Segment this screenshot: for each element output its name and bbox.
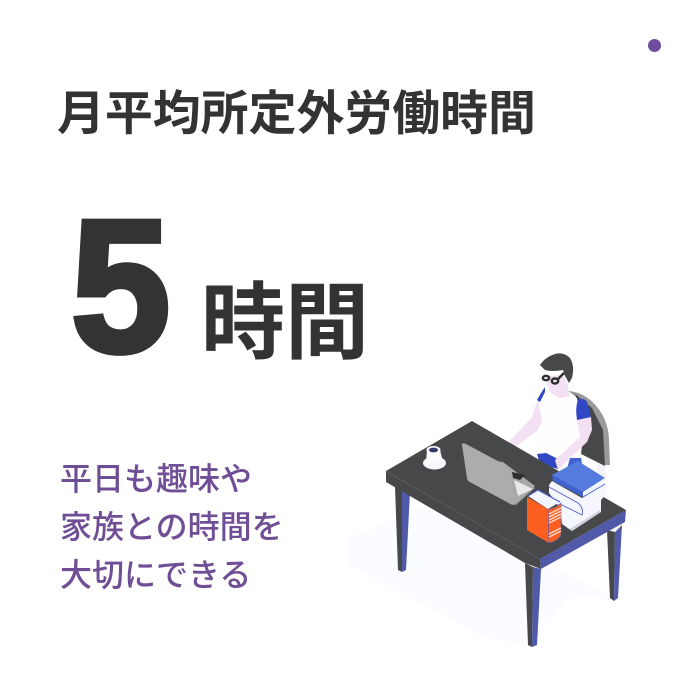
desk left edge <box>386 471 541 569</box>
shirt <box>537 397 581 462</box>
blue book <box>552 461 605 492</box>
description text: 平日も趣味や <box>60 460 252 496</box>
decorative purple dot <box>648 38 660 52</box>
person <box>509 353 592 472</box>
big number: 5: 5 <box>71 181 170 391</box>
right leg <box>607 530 615 601</box>
description text <box>60 460 284 593</box>
chair <box>568 391 610 480</box>
left arm <box>509 400 542 447</box>
title: 月平均所定外労働時間 <box>57 88 536 141</box>
left sleeve <box>537 387 545 402</box>
description text: 大切にできる <box>60 557 251 593</box>
desk top <box>386 421 626 559</box>
unit: hours: 時間 <box>201 276 369 370</box>
desk right side <box>540 510 626 569</box>
laptop <box>462 443 535 505</box>
front leg <box>525 563 533 647</box>
desk <box>386 421 626 647</box>
coffee cup <box>423 446 446 470</box>
back left leg <box>395 487 402 572</box>
orange book <box>528 490 560 509</box>
pants <box>537 453 560 469</box>
white books <box>549 481 607 531</box>
book stack <box>527 461 607 543</box>
right arm <box>555 417 592 470</box>
hair <box>540 353 573 383</box>
right sleeve <box>576 399 591 420</box>
description text: 家族との時間を <box>60 509 284 545</box>
face and neck <box>545 375 570 398</box>
glasses <box>543 373 564 384</box>
floor shadow <box>348 507 620 646</box>
